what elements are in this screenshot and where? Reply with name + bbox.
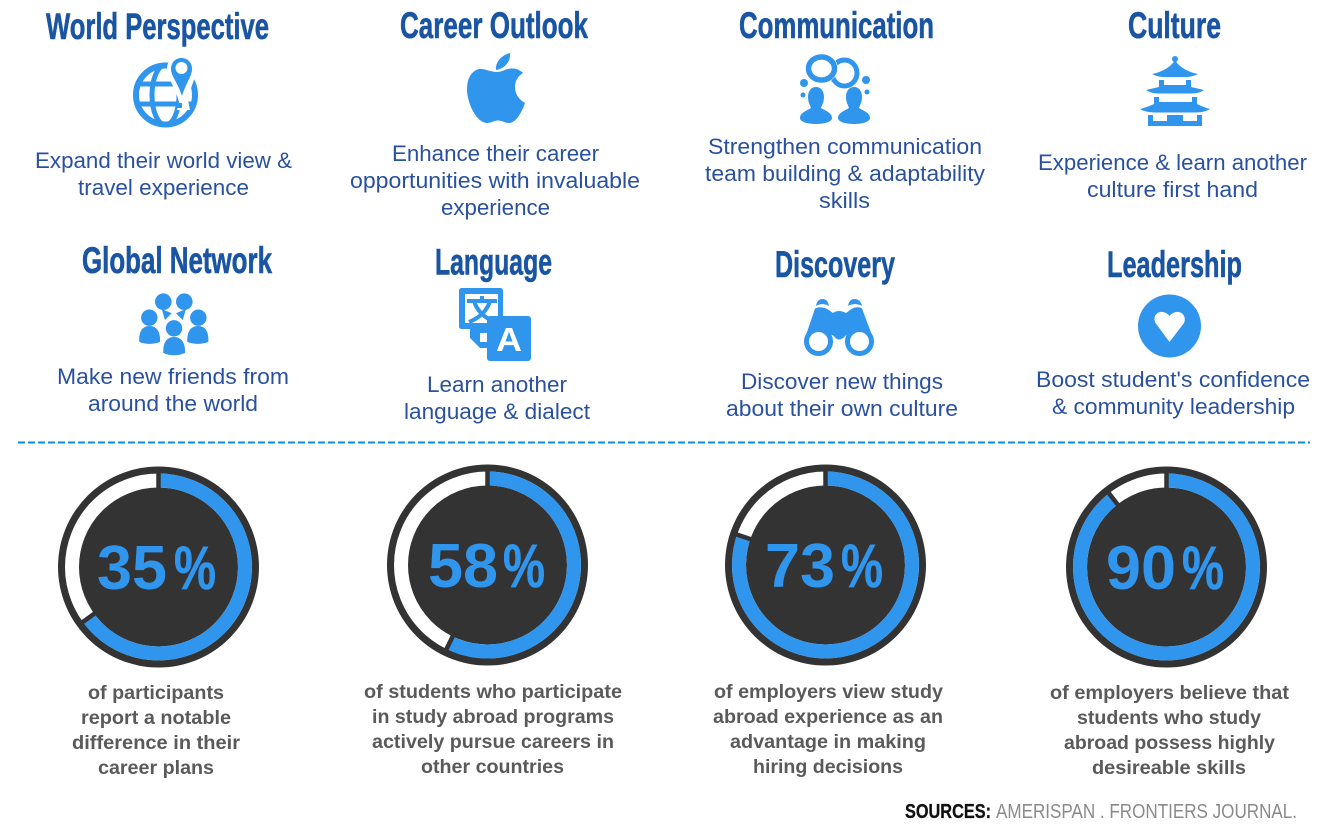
description <box>1038 150 1307 202</box>
value: % <box>174 534 216 602</box>
description <box>57 364 289 416</box>
icon: binoculars <box>805 299 873 354</box>
description: team building & adaptability <box>705 161 985 186</box>
description: & community leadership <box>1052 394 1295 419</box>
description <box>404 372 590 424</box>
description: travel experience <box>78 175 249 200</box>
panel: communication <box>705 5 985 213</box>
heading: leadership: Leadership <box>1107 244 1242 285</box>
value: 90 <box>1106 534 1176 603</box>
description: Discover new things <box>741 369 943 394</box>
icon: translate <box>459 288 531 361</box>
heading: discovery: Discovery <box>775 244 895 285</box>
description <box>35 148 292 200</box>
caption: of students who participate <box>364 681 622 703</box>
description: language & dialect <box>404 399 590 424</box>
value <box>428 532 545 601</box>
panel: leadership <box>1036 244 1310 419</box>
value <box>97 534 216 603</box>
icon: heart in circle <box>1138 294 1201 358</box>
caption: actively pursue careers in <box>372 731 614 753</box>
description: about their own culture <box>726 396 958 421</box>
caption <box>72 682 240 779</box>
icon: translate: A <box>496 321 522 358</box>
description <box>705 134 985 213</box>
caption: of employers believe that <box>1050 682 1290 704</box>
caption: students who study <box>1077 707 1261 729</box>
value <box>765 532 883 601</box>
heading: culture: Culture <box>1128 5 1221 46</box>
description: Make new friends from <box>57 364 289 389</box>
sources line: SOURCES: <box>905 801 991 823</box>
icon: globe with pin <box>136 54 196 125</box>
panel: stat 90% <box>1050 466 1290 779</box>
icon: two people talking <box>800 54 870 124</box>
panel: career outlook <box>350 5 640 220</box>
description: skills <box>819 188 870 213</box>
caption <box>713 681 943 778</box>
panel: language <box>404 242 590 424</box>
value: % <box>841 532 883 600</box>
caption: of participants <box>88 682 224 704</box>
caption: hiring decisions <box>753 756 903 778</box>
caption: abroad possess highly <box>1064 732 1275 754</box>
caption: of employers view study <box>714 681 943 703</box>
value: % <box>503 532 545 600</box>
panel: stat 58% <box>364 464 622 778</box>
value: % <box>1182 534 1224 602</box>
value <box>1106 534 1224 603</box>
donut chart: 35% <box>58 466 259 668</box>
description: Learn another <box>427 372 567 397</box>
heading: world perspective: World Perspective <box>46 6 269 47</box>
caption: advantage in making <box>730 731 926 753</box>
description: opportunities with invaluable <box>350 168 640 193</box>
description <box>350 141 640 220</box>
icon: pagoda <box>1140 56 1210 126</box>
caption: report a notable <box>81 707 231 729</box>
description: Enhance their career <box>392 141 599 166</box>
panel: global network <box>57 240 289 416</box>
description: around the world <box>88 391 258 416</box>
description: Strengthen communication <box>708 134 982 159</box>
heading: communication: Communication <box>739 5 934 46</box>
caption: in study abroad programs <box>372 706 614 728</box>
donut chart: 90% <box>1066 466 1267 668</box>
icon: group of people <box>139 293 208 355</box>
description: experience <box>441 195 550 220</box>
panel: discovery <box>726 244 958 421</box>
panel: world perspective <box>35 6 292 200</box>
description: Experience & learn another <box>1038 150 1307 175</box>
caption <box>364 681 622 778</box>
value: 58 <box>428 532 498 601</box>
description: Expand their world view & <box>35 148 292 173</box>
panel: stat 35% <box>58 466 259 779</box>
caption: abroad experience as an <box>713 706 943 728</box>
caption: career plans <box>98 757 214 779</box>
value: 73 <box>765 532 835 601</box>
donut chart: 58% <box>387 464 588 666</box>
donut chart: 73% <box>725 464 926 666</box>
caption: difference in their <box>72 732 240 754</box>
description <box>1036 367 1310 419</box>
panel: culture <box>1038 5 1307 202</box>
caption <box>1050 682 1290 779</box>
heading: language: Language <box>435 242 552 282</box>
panel: stat 73% <box>713 464 943 778</box>
value: 35 <box>97 534 167 603</box>
heading: career outlook: Career Outlook <box>400 5 588 46</box>
description: culture first hand <box>1087 177 1258 202</box>
description <box>726 369 958 421</box>
heading: global network: Global Network <box>82 240 272 281</box>
icon: apple <box>467 53 525 123</box>
description: Boost student's confidence <box>1036 367 1310 392</box>
caption: other countries <box>421 756 564 778</box>
caption: desireable skills <box>1092 757 1246 779</box>
